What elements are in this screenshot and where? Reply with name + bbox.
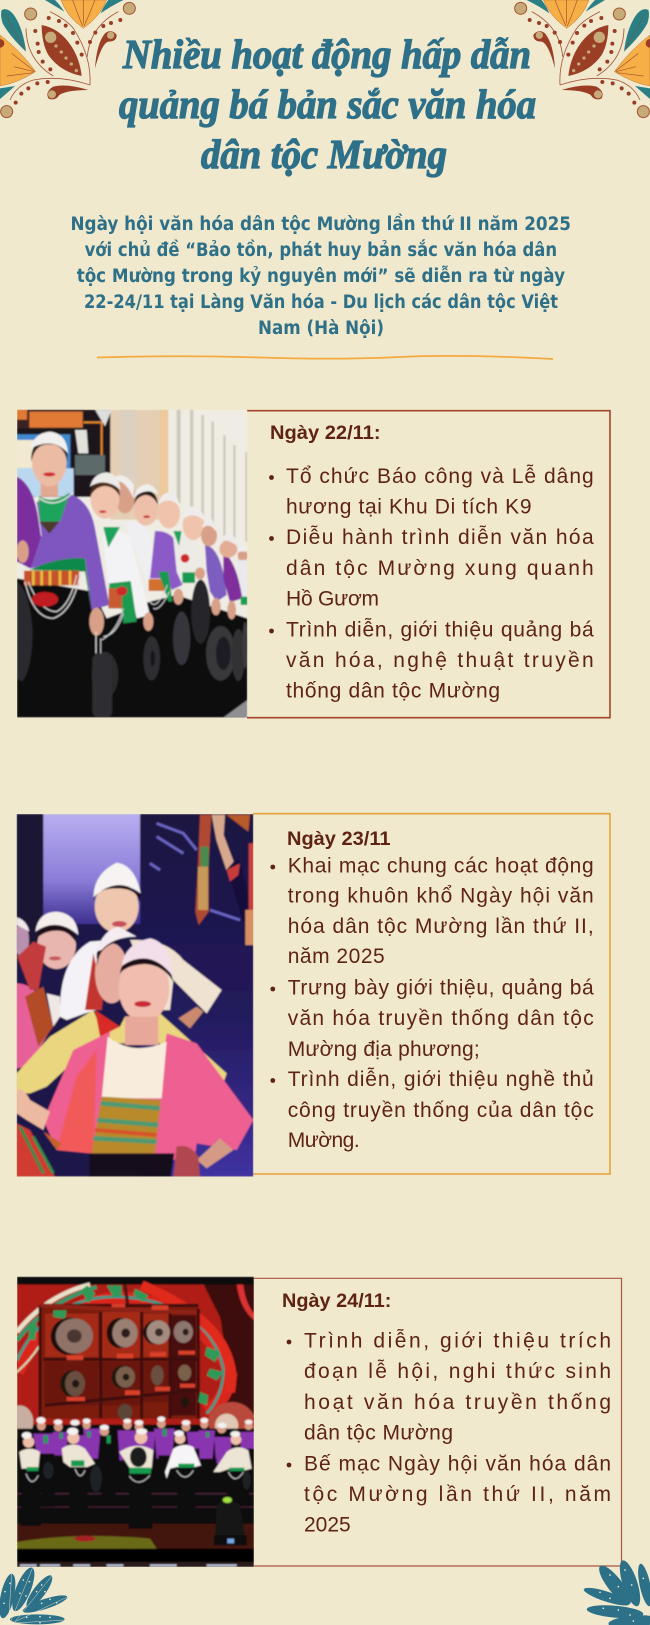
corner ornament: top right bbox=[515, 0, 650, 118]
bullet list: Diễu hành trình diễn văn hóa bbox=[286, 526, 594, 549]
bullet list bbox=[269, 465, 594, 703]
bullet list: Khai mạc chung các hoạt động bbox=[288, 855, 594, 878]
corner ornament: top left bbox=[0, 0, 135, 118]
leaves: bottom left bbox=[0, 1565, 69, 1625]
date heading: Ngày 22/11: bbox=[270, 423, 381, 444]
bullet list: hóa dân tộc Mường lần thứ II, bbox=[288, 915, 594, 938]
date heading: Ngày 24/11: bbox=[282, 1291, 391, 1312]
leaves: bottom right bbox=[582, 1558, 650, 1625]
bullet list: thống dân tộc Mường bbox=[286, 680, 500, 703]
bullet list: Mường địa phương; bbox=[288, 1038, 480, 1061]
title: dân tộc Mường bbox=[201, 131, 447, 177]
bullet list: Bế mạc Ngày hội văn hóa dân bbox=[304, 1453, 611, 1476]
bullet list: Trình diễn, giới thiệu quảng bá bbox=[286, 619, 594, 642]
bullet list: hương tại Khu Di tích K9 bbox=[286, 496, 532, 518]
bullet list: hoạt văn hóa truyền thống bbox=[304, 1391, 611, 1414]
bullet list: Hồ Gươm bbox=[286, 588, 379, 611]
date heading: Ngày 23/11 bbox=[287, 829, 391, 850]
intro paragraph: Nam (Hà Nội) bbox=[258, 318, 384, 339]
bullet list: Mường. bbox=[288, 1129, 360, 1152]
photo: dancers in pink and yellow on stage bbox=[14, 814, 253, 1177]
photo: parade of Muong women with gongs bbox=[17, 410, 248, 720]
bullet list: văn hóa truyền thống dân tộc bbox=[288, 1007, 594, 1030]
bullet list: trong khuôn khổ Ngày hội văn bbox=[288, 885, 594, 908]
panel frame bbox=[247, 411, 610, 718]
title: quảng bá bản sắc văn hóa bbox=[119, 81, 536, 127]
intro paragraph: với chủ đề “Bảo tồn, phát huy bản sắc văn hóa dân bbox=[85, 240, 557, 261]
panel: 23/11 bbox=[14, 814, 610, 1177]
panel: 24/11 bbox=[7, 1277, 622, 1567]
bullet list: công truyền thống của dân tộc bbox=[288, 1099, 594, 1122]
intro paragraph: Ngày hội văn hóa dân tộc Mường lần thứ II năm 2025 bbox=[70, 214, 571, 235]
bullet list: dân tộc Mường xung quanh bbox=[286, 557, 594, 580]
photo: gong performance on stage bbox=[7, 1277, 255, 1567]
bullet list: tộc Mường lần thứ II, năm bbox=[304, 1483, 611, 1506]
title bbox=[119, 31, 536, 177]
intro paragraph: 22-24/11 tại Làng Văn hóa - Du lịch các dân tộc Việt bbox=[84, 292, 558, 313]
bullet list: Trình diễn, giới thiệu trích bbox=[304, 1330, 611, 1353]
bullet list: Trình diễn, giới thiệu nghề thủ bbox=[288, 1068, 594, 1091]
bullet list bbox=[287, 1330, 611, 1537]
bullet list: năm 2025 bbox=[288, 945, 385, 968]
panel frame bbox=[253, 814, 610, 1174]
bullet list bbox=[270, 855, 594, 1152]
intro paragraph: tộc Mường trong kỷ nguyên mới” sẽ diễn ra từ ngày bbox=[77, 265, 565, 287]
panel frame bbox=[254, 1278, 622, 1566]
orange divider bbox=[97, 356, 553, 359]
bullet list: đoạn lễ hội, nghi thức sinh bbox=[304, 1360, 611, 1383]
intro paragraph bbox=[70, 214, 571, 339]
bullet list: Trưng bày giới thiệu, quảng bá bbox=[288, 977, 594, 1000]
bullet list: dân tộc Mường bbox=[304, 1422, 453, 1445]
bullet list: 2025 bbox=[304, 1514, 351, 1537]
bullet list: văn hóa, nghệ thuật truyền bbox=[286, 649, 594, 672]
bullet list: Tổ chức Báo công và Lễ dâng bbox=[286, 465, 594, 488]
title: Nhiều hoạt động hấp dẫn bbox=[122, 31, 531, 77]
panel: 22/11 bbox=[17, 410, 610, 720]
